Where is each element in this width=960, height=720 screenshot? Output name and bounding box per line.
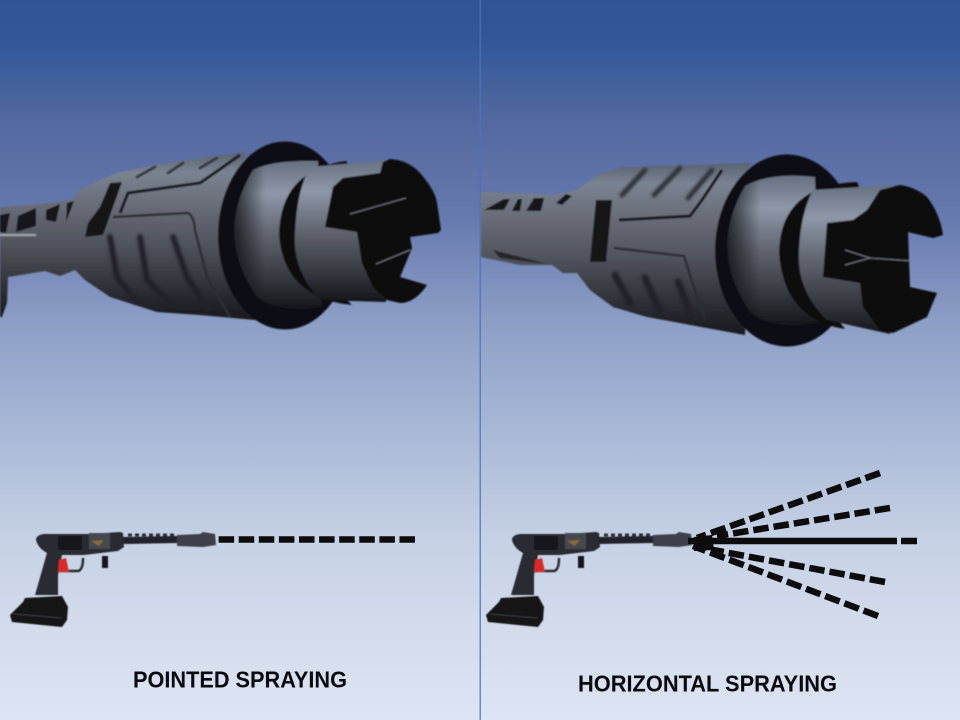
label: horizontal spraying: HORIZONTAL SPRAYING <box>578 670 837 696</box>
spray line: pointed <box>218 536 415 543</box>
panel: pointed spraying <box>0 142 441 692</box>
nozzle close-up: horizontal setting <box>481 154 943 346</box>
panel: horizontal spraying <box>481 154 943 696</box>
spray gun: horizontal <box>486 532 692 627</box>
divider between panels <box>480 0 481 720</box>
spray fan: five dashed jets <box>688 473 917 616</box>
nozzle close-up: pointed setting <box>0 142 441 330</box>
label: pointed spraying: POINTED SPRAYING <box>133 666 347 692</box>
spray gun: pointed <box>10 532 216 627</box>
